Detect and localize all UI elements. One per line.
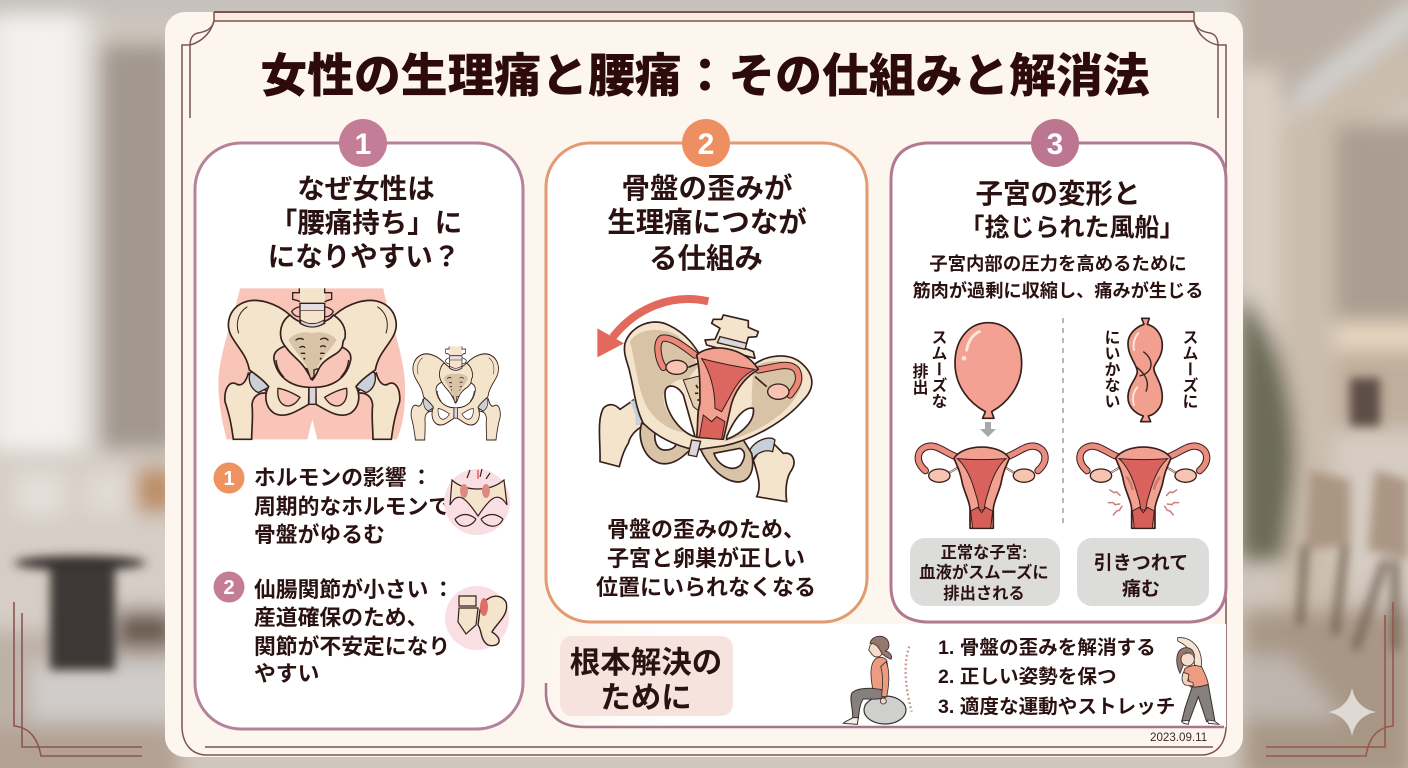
pubic rings bbox=[640, 423, 692, 464]
panel 2 text: 位置にいられなくなる bbox=[596, 575, 816, 600]
main card bbox=[165, 12, 1243, 757]
solution list: 2. 正しい姿勢を保つ bbox=[938, 666, 1117, 688]
panel 1: why women bbox=[195, 119, 523, 729]
reason 2 text: 仙腸関節が小さい： bbox=[254, 577, 454, 602]
panel 2 text: 子宮と卵巣が正しい bbox=[607, 546, 805, 571]
caption: pain: 痛む bbox=[1122, 577, 1160, 600]
panel 2 heading: 生理痛につなが bbox=[607, 206, 807, 239]
icon: normal balloon bbox=[955, 323, 1022, 418]
reason 1 text: 周期的なホルモンで bbox=[254, 494, 450, 519]
illustration: tilted pelvis with uterus bbox=[597, 299, 812, 502]
label: smooth discharge: スムーズな bbox=[928, 329, 946, 409]
panel 2: pelvic distortion bbox=[546, 119, 867, 622]
badge 2 bbox=[682, 119, 730, 167]
icon: loosened pelvis bbox=[444, 469, 510, 535]
badge 1 bbox=[339, 119, 387, 167]
divider bbox=[1062, 318, 1064, 526]
reason 2 text: 関節が不安定になり bbox=[254, 634, 450, 659]
panel 1 heading: なぜ女性は bbox=[297, 173, 435, 204]
panel 2 heading: る仕組み bbox=[649, 243, 763, 275]
icon: sacroiliac joint bbox=[445, 586, 509, 650]
panel 1 heading bbox=[268, 173, 462, 272]
reason 2 number: 2 bbox=[223, 577, 235, 599]
solution heading bbox=[560, 636, 733, 716]
panel 3 subtitle bbox=[912, 253, 1204, 301]
uterus tilted bbox=[658, 338, 799, 439]
reason 1 text bbox=[254, 465, 450, 547]
label: not smooth: にいかない bbox=[1102, 329, 1120, 409]
panel 2 heading bbox=[607, 172, 807, 275]
panel 3: uterus deformation bbox=[891, 119, 1226, 622]
central openings bbox=[665, 386, 695, 437]
icon: woman seated on balance ball bbox=[843, 636, 912, 724]
title: 女性の生理痛と腰痛：その仕組みと解消法 bbox=[260, 50, 1150, 102]
solution heading: ために bbox=[600, 681, 692, 715]
solution list: 3. 適度な運動やストレッチ bbox=[938, 696, 1175, 718]
panel 3 subtitle: 子宮内部の圧力を高めるために bbox=[929, 253, 1187, 274]
panel 2 heading: 骨盤の歪みが bbox=[621, 172, 793, 205]
panel 1 heading: 「腰痛持ち」に bbox=[270, 207, 462, 238]
panel 3 subtitle: 筋肉が過剰に収縮し、痛みが生じる bbox=[912, 280, 1204, 301]
solution heading: 根本解決の bbox=[570, 646, 722, 680]
icon: sparkle bbox=[1328, 688, 1376, 736]
icon: normal uterus bbox=[918, 446, 1045, 528]
femurs bbox=[599, 400, 647, 467]
badge 3: 3 bbox=[1047, 128, 1063, 161]
panel 2 text: 骨盤の歪みのため、 bbox=[607, 517, 805, 542]
reason 1 number bbox=[214, 462, 244, 494]
arrow: tilt direction bbox=[597, 299, 708, 357]
label: smooth discharge bbox=[910, 329, 946, 409]
label: smooth discharge: 排出 bbox=[910, 363, 928, 395]
reason 2 text bbox=[254, 577, 454, 686]
decorative corner frame: bottom left bbox=[14, 602, 142, 756]
spine bbox=[705, 315, 758, 358]
arrow: discharge bbox=[980, 422, 996, 437]
reason 1 text: ホルモンの影響： bbox=[254, 465, 432, 490]
pelvic ring bbox=[624, 322, 812, 450]
icon: twisted balloon bbox=[1128, 318, 1162, 422]
caption: normal uterus: 血液がスムーズに bbox=[919, 563, 1049, 582]
badge 3 bbox=[1031, 119, 1079, 167]
reason 2 text: 産道確保のため、 bbox=[254, 605, 428, 630]
caption: normal uterus: 正常な子宮: bbox=[941, 543, 1027, 562]
big pelvis with hips bbox=[218, 288, 405, 439]
decorative corner frame: bottom right bbox=[1266, 602, 1393, 756]
label: not smooth bbox=[1102, 329, 1198, 409]
card frame lines bbox=[182, 12, 1226, 755]
reason 2 number bbox=[214, 572, 244, 602]
icon: painful uterus bbox=[1080, 446, 1207, 528]
panel 3 heading bbox=[959, 178, 1185, 242]
caption: pain: 引きつれて bbox=[1094, 552, 1188, 574]
reason 1 number: 1 bbox=[223, 468, 235, 490]
reason 2 text: やすい bbox=[254, 661, 319, 686]
icon: woman stretching bbox=[1177, 638, 1219, 724]
illustration: pelvis comparison bbox=[218, 288, 500, 440]
caption: pain bbox=[1077, 538, 1209, 606]
caption: normal uterus: 排出される bbox=[943, 585, 1025, 603]
panel 3 heading: 「捻じられた風船」 bbox=[959, 214, 1185, 242]
panel 1 heading: になりやすい？ bbox=[268, 241, 460, 272]
badge 2: 2 bbox=[698, 128, 714, 161]
date: 2023.09.11 bbox=[1150, 731, 1207, 744]
badge 1: 1 bbox=[355, 128, 371, 161]
panel 4: root solution bbox=[546, 624, 1226, 727]
panel 3 heading: 子宮の変形と bbox=[976, 178, 1140, 209]
reason 1 text: 骨盤がゆるむ bbox=[254, 522, 385, 547]
caption: normal uterus bbox=[910, 538, 1060, 606]
label: not smooth: スムーズに bbox=[1180, 329, 1198, 409]
solution list bbox=[938, 637, 1175, 718]
panel 2 text bbox=[596, 517, 816, 600]
pubic joint bbox=[688, 440, 701, 457]
small pelvis bbox=[411, 346, 500, 440]
solution list: 1. 骨盤の歪みを解消する bbox=[938, 637, 1156, 659]
